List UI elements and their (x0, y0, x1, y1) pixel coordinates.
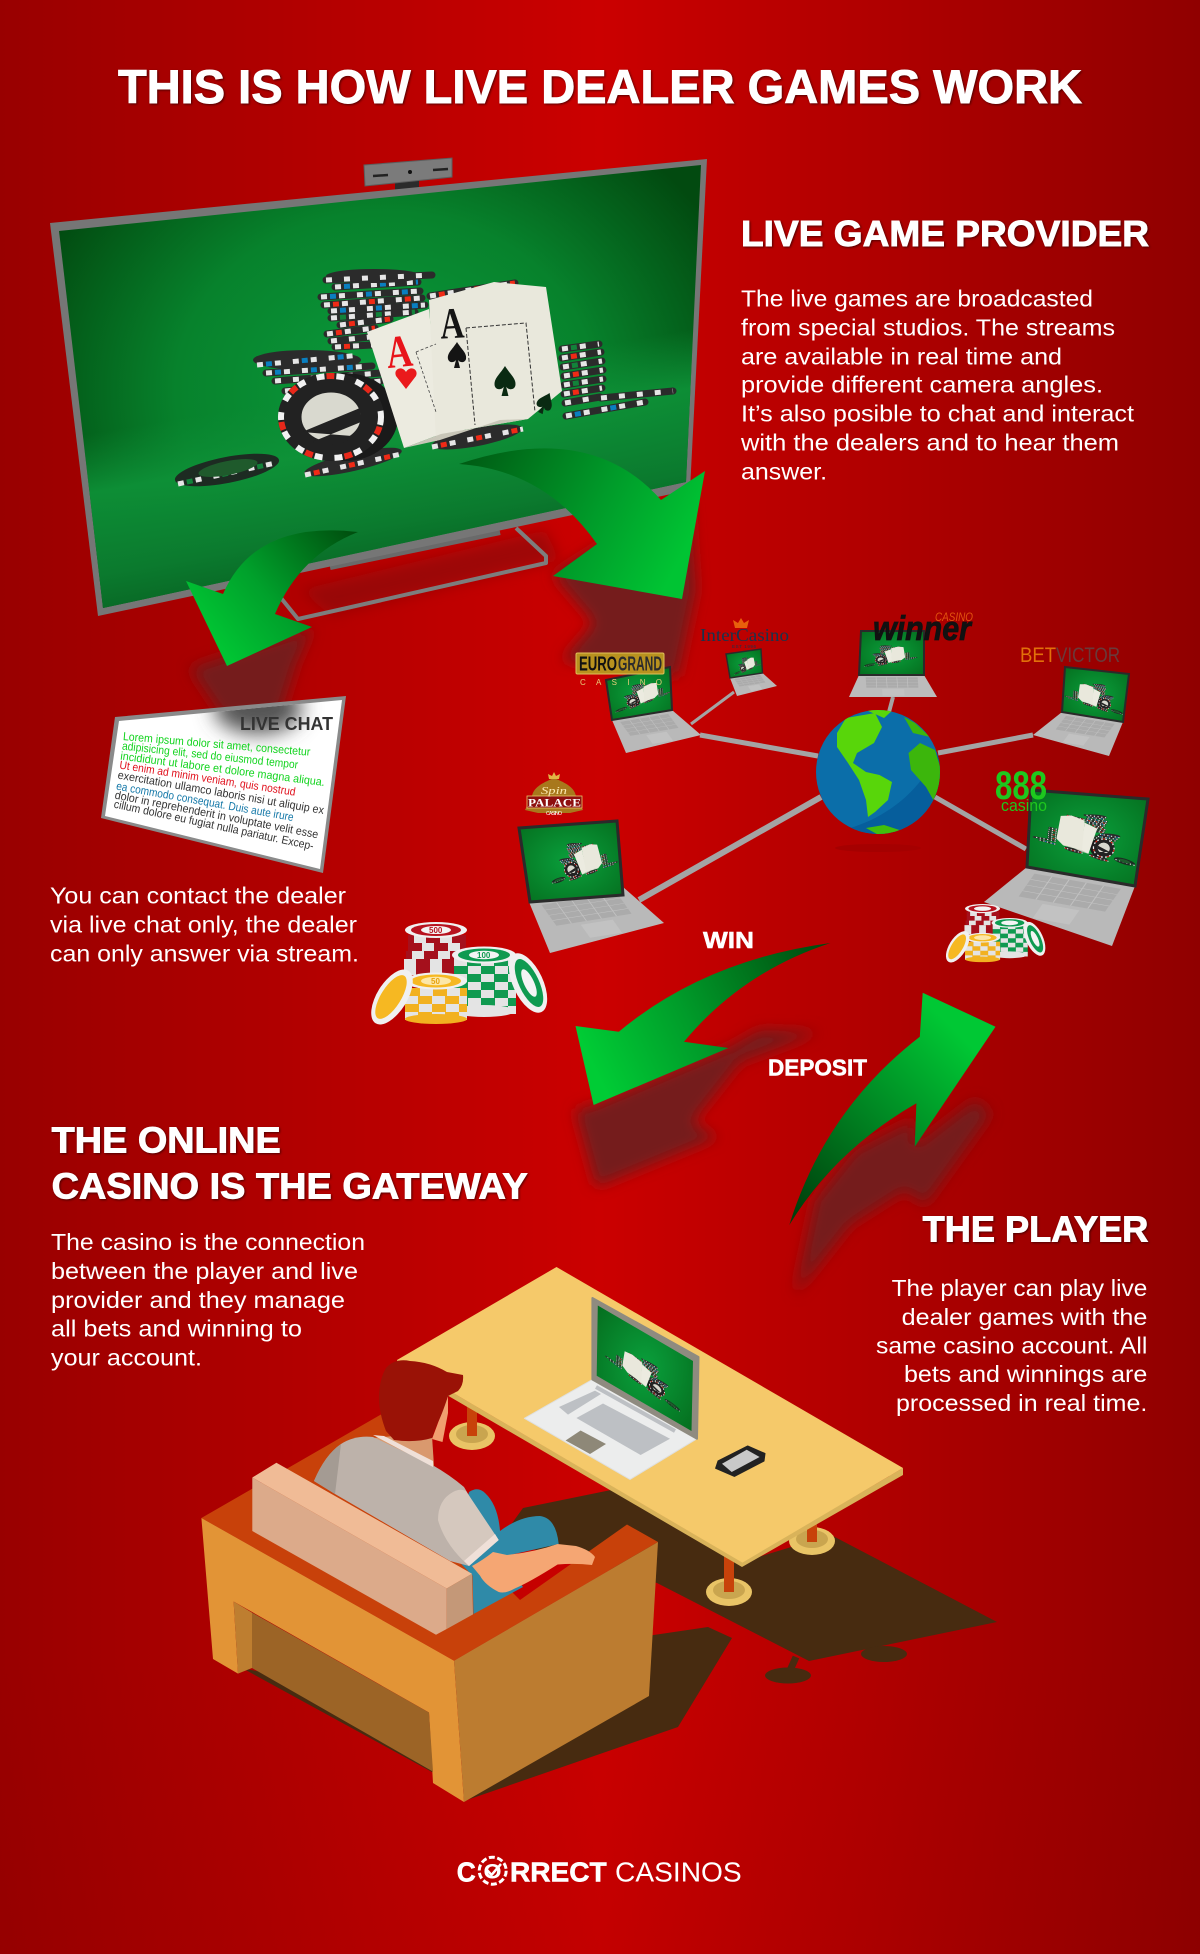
live chat message lines (113, 731, 325, 853)
logo: Spin Palace (525, 772, 583, 817)
monitor stand (281, 528, 560, 619)
live chat message lines: dolor in reprehenderit in voluptate velit esse (114, 790, 319, 841)
illustration: player at desk (201, 1267, 997, 1802)
text block: online casino (51, 1229, 365, 1371)
arm (472, 1544, 595, 1593)
armchair (201, 1413, 658, 1802)
arrow: deposit (789, 993, 996, 1225)
live chat heading: LIVE CHAT (240, 713, 334, 734)
heading: the online casino is the gateway (52, 1120, 528, 1206)
monitor frame (50, 159, 707, 616)
neck (373, 1436, 434, 1466)
text block: online casino: all bets and winning to (51, 1316, 302, 1342)
arrow: win (576, 943, 830, 1105)
chips: small stack (941, 904, 1050, 966)
logo chip icon: O (484, 1860, 502, 1884)
sleeve (438, 1490, 499, 1566)
phone (716, 1446, 765, 1476)
text block: live game provider: answer. (741, 458, 827, 484)
text block: live game provider: with the dealers and to hear them (740, 429, 1119, 455)
chip values (429, 926, 491, 986)
live chat message lines: Lorem ipsum dolor sit amet, consectetur (122, 731, 311, 759)
live chat message lines: cillum dolore eu fugiat nulla pariatur. Excep- (113, 799, 315, 853)
table top (397, 1267, 903, 1567)
text block: live chat note (50, 882, 359, 966)
heading: the player: THE PLAYER (923, 1209, 1148, 1250)
monitor screen (59, 165, 701, 608)
monitor (50, 158, 707, 619)
playing card: ace of hearts: A (384, 325, 415, 378)
chair cushion (252, 1463, 473, 1635)
text block: online casino: provider and they manage (51, 1287, 345, 1313)
laptop: Eurogrand (606, 667, 701, 753)
logo: Spin Palace: PALACE (528, 796, 581, 810)
arrow shadow: left (190, 628, 312, 716)
text block: live game provider: are available in real time and (741, 343, 1062, 369)
logo: 888 casino: 888 (995, 764, 1047, 808)
logo: Correct Casinos: CASINOS (615, 1857, 742, 1888)
title: THIS IS HOW LIVE DEALER GAMES WORK (118, 60, 1082, 113)
heading: the online casino is the gateway: CASINO IS THE GATEWAY (52, 1165, 528, 1206)
collar (373, 1435, 433, 1467)
text block: the player (876, 1275, 1147, 1416)
table legs (449, 1400, 835, 1606)
laptop: Spin Palace (519, 821, 664, 953)
laptop: BetVictor (1033, 667, 1129, 756)
text block: live game provider: The live games are broadcasted (741, 286, 1093, 312)
logo: Eurogrand: EURO (579, 654, 617, 676)
playing card: ace of spades (439, 298, 557, 425)
globe shadow (835, 844, 921, 852)
live chat message lines: incididunt ut labore et dolore magna aliqua. (120, 751, 325, 789)
text block: online casino: The casino is the connection (51, 1229, 365, 1255)
heading: live game provider: LIVE GAME PROVIDER (741, 213, 1149, 254)
table laptop (524, 1298, 698, 1479)
arrow: monitor to network (459, 448, 705, 599)
logo: Eurogrand: CASINO (580, 678, 662, 687)
text block: live chat note: can only answer via stream. (50, 940, 359, 966)
live chat message lines: ea commodo consequat. Duis aute irure (115, 781, 294, 824)
text block: the player: processed in real time. (896, 1390, 1147, 1416)
live chat message lines: exercitation ullamco laboris nisi ut aliquip ex (117, 770, 325, 817)
text block: live chat note: via live chat only, the dealer (50, 911, 357, 937)
text block: the player: same casino account. All (876, 1332, 1147, 1358)
logo: Correct Casinos (457, 1857, 742, 1888)
person (314, 1360, 595, 1614)
chip values: 100 (477, 951, 491, 960)
text block: the player: The player can play live (892, 1275, 1147, 1301)
logo: InterCasino (700, 618, 789, 649)
logo: 888 casino (995, 764, 1047, 815)
arrow shadow: deposit (795, 1100, 991, 1295)
globe (816, 710, 942, 840)
logo: BetVictor (1020, 644, 1120, 667)
logo: Eurogrand (576, 653, 664, 687)
label: win: WIN (703, 927, 754, 953)
text block: live game provider: It’s also posible to chat and interact (741, 401, 1135, 427)
playing card: ace of hearts (384, 325, 436, 412)
heading: the online casino is the gateway: THE ONLINE (52, 1120, 281, 1161)
logo: Winner casino: winner (873, 610, 973, 648)
arrow shadow: right (553, 500, 696, 677)
hair (379, 1360, 463, 1441)
trousers (450, 1489, 559, 1614)
network connection lines (639, 692, 1033, 900)
logo: Eurogrand: GRAND (618, 654, 662, 676)
logo: Correct Casinos: RRECT (510, 1857, 607, 1888)
text block: live game provider (740, 286, 1135, 484)
logo: Winner casino: CASINO (935, 610, 973, 624)
chip values: 50 (431, 977, 440, 986)
panel: live chat (101, 682, 346, 873)
arrow: monitor to live chat (186, 530, 358, 666)
laptop: InterCasino (726, 649, 777, 696)
laptop: Winner (849, 631, 937, 697)
table shadow (500, 1490, 997, 1684)
logo: Spin Palace: CASINO (546, 811, 562, 817)
playing card: ace of spades: A (439, 298, 466, 349)
ear and face (432, 1396, 448, 1442)
text block: live game provider: from special studios. The streams (741, 315, 1115, 341)
live chat message lines: Ut enim ad minim veniam, quis nostrud (119, 760, 296, 799)
logo: BetVictor: VICTOR (1056, 644, 1120, 667)
text block: the player: dealer games with the (902, 1304, 1147, 1330)
chair shadow (242, 1627, 732, 1801)
chips: large stack (363, 922, 555, 1031)
text block: online casino: between the player and live (51, 1258, 358, 1284)
logo: 888 casino: casino (1001, 796, 1047, 815)
logo chip icon (479, 1857, 506, 1884)
text block: live game provider: provide different camera angles. (741, 372, 1103, 398)
logo: InterCasino: EST 1996 (732, 644, 756, 649)
logo: Spin Palace: Spin (541, 785, 568, 797)
text block: the player: bets and winnings are (904, 1361, 1147, 1387)
laptop: 888 casino (984, 790, 1148, 946)
label: deposit: DEPOSIT (768, 1055, 867, 1081)
logo: Correct Casinos: C (457, 1857, 476, 1888)
live chat message lines: adipisicing elit, sed do eiusmod tempor (121, 741, 299, 772)
logo: BetVictor: BET (1020, 644, 1056, 667)
webcam (364, 158, 452, 195)
torso (314, 1437, 496, 1566)
arrow shadow: win (575, 1030, 820, 1187)
text block: online casino: your account. (51, 1345, 202, 1371)
logo: InterCasino: InterCasino (700, 625, 789, 645)
text block: live chat note: You can contact the dealer (50, 882, 346, 908)
chip values: 500 (429, 926, 443, 935)
